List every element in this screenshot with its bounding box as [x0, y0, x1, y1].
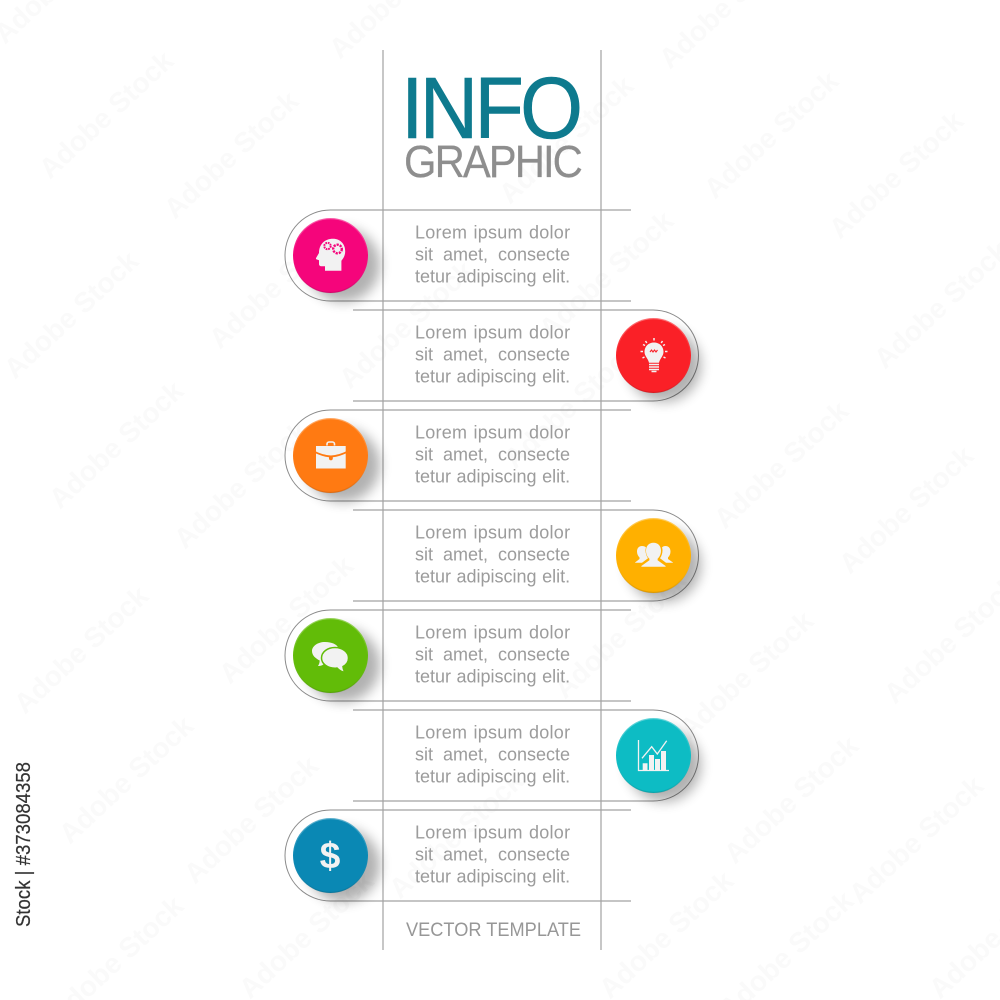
background watermark: Adobe Stock: [383, 765, 530, 904]
text: Lorem ipsum dolor: [415, 222, 570, 242]
badge: [616, 518, 691, 593]
text: Lorem ipsum dolor: [415, 522, 570, 542]
frame: [285, 210, 631, 301]
background watermark: Adobe Stock: [698, 65, 845, 204]
title: GRAPHIC: GRAPHIC: [404, 138, 582, 187]
background watermark: Adobe Stock: [53, 710, 200, 849]
footer label: VECTOR TEMPLATE: [406, 920, 581, 941]
text: Lorem ipsum dolor: [415, 622, 570, 642]
background watermark: Adobe Stock: [333, 255, 480, 394]
background watermark: Adobe Stock: [168, 415, 315, 554]
text: sit amet, consecte: [415, 844, 570, 864]
background watermark: Adobe Stock: [493, 70, 640, 209]
badge: [293, 818, 368, 893]
text: Lorem ipsum dolor: [415, 322, 570, 342]
text: tetur adipiscing elit.: [415, 466, 570, 486]
step 2: red bulb: [353, 310, 701, 402]
step 4: amber team: [353, 510, 701, 602]
text: [415, 422, 570, 486]
shadow: [306, 828, 380, 902]
badge: [616, 318, 691, 393]
background watermark: Adobe Stock: [0, 245, 145, 384]
frame: [285, 610, 631, 701]
text: tetur adipiscing elit.: [415, 266, 570, 286]
background watermark: Adobe Stock: [178, 750, 325, 889]
text: Lorem ipsum dolor: [415, 422, 570, 442]
text: [415, 722, 570, 786]
badge: [293, 618, 368, 693]
shadow: [627, 328, 701, 402]
text: tetur adipiscing elit.: [415, 566, 570, 586]
text: tetur adipiscing elit.: [415, 366, 570, 386]
background watermark: Adobe Stock: [203, 215, 350, 354]
badge: [293, 218, 368, 293]
title: [401, 59, 582, 187]
text: [415, 222, 570, 286]
background watermark: Adobe Stock: [498, 335, 645, 474]
shadow: [627, 528, 701, 602]
icon: people: [635, 543, 673, 567]
step 1: pink brain: [285, 210, 631, 302]
text: [415, 322, 570, 386]
text: tetur adipiscing elit.: [415, 766, 570, 786]
icon: dollar sign: $: [320, 835, 341, 876]
text: sit amet, consecte: [415, 344, 570, 364]
text: [415, 822, 570, 886]
text: sit amet, consecte: [415, 644, 570, 664]
text: sit amet, consecte: [415, 244, 570, 264]
shadow: [627, 728, 701, 802]
frame: [353, 710, 698, 801]
shadow: [306, 428, 380, 502]
background watermark: Adobe Stock: [708, 395, 855, 534]
shadow: [306, 228, 380, 302]
frame: [353, 310, 698, 401]
frame: [285, 410, 631, 501]
badge shading: [616, 718, 690, 792]
text: tetur adipiscing elit.: [415, 666, 570, 686]
badge shading: [294, 618, 368, 692]
text: tetur adipiscing elit.: [415, 866, 570, 886]
badge shading: [294, 818, 368, 892]
background watermark: Adobe Stock: [718, 730, 865, 869]
icon: light bulb: [640, 338, 668, 372]
background watermark: Adobe Stock: [213, 550, 360, 689]
badge: [616, 718, 691, 793]
text: Lorem ipsum dolor: [415, 722, 570, 742]
text: [415, 522, 570, 586]
text: sit amet, consecte: [415, 544, 570, 564]
background watermark: Adobe Stock: [673, 605, 820, 744]
icon: chat bubbles: [312, 642, 348, 672]
background watermark: Adobe Stock: [823, 105, 970, 244]
step 6: teal chart: [353, 710, 701, 802]
text: [415, 622, 570, 686]
background watermark: Adobe Stock: [843, 770, 990, 909]
background watermark: Adobe Stock: [33, 45, 180, 184]
badge: [293, 418, 368, 493]
badge shading: [616, 318, 690, 392]
shadow: [306, 628, 380, 702]
title: INFO: INFO: [401, 59, 580, 157]
background watermark: Adobe Stock: [8, 580, 155, 719]
step 7: blue dollar: [285, 810, 631, 902]
badge shading: [294, 418, 368, 492]
frame: [285, 810, 631, 901]
text: sit amet, consecte: [415, 744, 570, 764]
step 5: green chat: [285, 610, 631, 702]
icon: bar chart: [638, 740, 669, 770]
background watermark: Adobe Stock: [548, 565, 695, 704]
frame: [353, 510, 698, 601]
text: Lorem ipsum dolor: [415, 822, 570, 842]
step 3: orange briefcase: [285, 410, 631, 502]
badge shading: [616, 518, 690, 592]
text: sit amet, consecte: [415, 444, 570, 464]
background watermark: Adobe Stock: [833, 440, 980, 579]
stock id side label: Stock | #373084358: [13, 762, 35, 927]
background watermark: Adobe Stock: [533, 205, 680, 344]
central column lines: [383, 50, 601, 950]
badge shading: [294, 218, 368, 292]
icon: head with gears: [316, 239, 345, 271]
background watermark: Adobe Stock: [158, 85, 305, 224]
background watermark: Adobe Stock: [43, 375, 190, 514]
icon: briefcase: [316, 442, 346, 468]
